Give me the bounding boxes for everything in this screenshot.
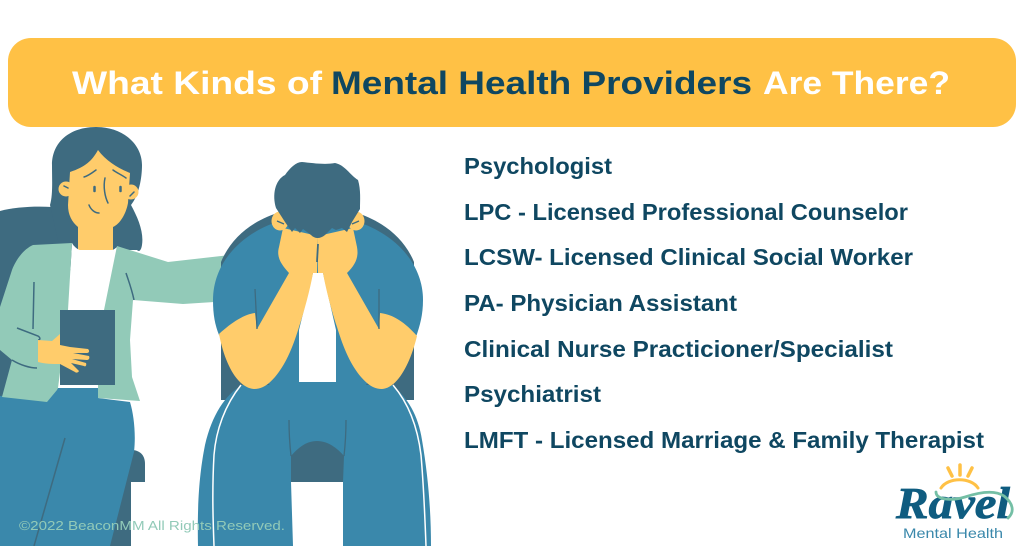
title (72, 65, 950, 101)
provider: psychiatrist: Psychiatrist (464, 381, 601, 407)
woman's jacket (0, 243, 230, 402)
title: What Kinds of (72, 65, 322, 101)
provider: LMFT: LMFT - Licensed Marriage & Family Therapist (464, 427, 984, 453)
provider: clinical nurse: Clinical Nurse Practicioner/Specialist (464, 336, 893, 362)
logo: Ravel Mental Health (895, 465, 1012, 541)
title: Are There? (763, 65, 950, 101)
provider: psychologist: Psychologist (464, 153, 612, 179)
woman's shirt (58, 243, 117, 388)
title: Mental Health Providers (331, 65, 752, 101)
woman's facial features (64, 170, 134, 213)
copyright notice: ©2022 BeaconMM All Rights Reserved. (19, 518, 285, 533)
man's shirt (213, 215, 423, 400)
woman's chair (0, 207, 145, 546)
man's hair (274, 162, 360, 238)
illustration: distressed man (198, 162, 431, 546)
man's arms and hands (219, 212, 417, 389)
jacket detail lines (12, 273, 134, 368)
man's detail lines (255, 221, 379, 329)
shirt centre white (299, 273, 336, 382)
provider list (464, 153, 984, 453)
chair seat between legs (291, 441, 344, 482)
logo sun (941, 465, 978, 488)
leg stripes (213, 385, 426, 546)
man's chair (221, 207, 414, 400)
logo wave (936, 492, 1012, 518)
logo tagline: Mental Health (903, 525, 1003, 541)
provider: PA: PA- Physician Assistant (464, 290, 737, 316)
illustration: woman comforting (0, 127, 230, 546)
provider: LPC: LPC - Licensed Professional Counselor (464, 199, 908, 225)
provider: LCSW: LCSW- Licensed Clinical Social Worker (464, 244, 913, 270)
woman's hair (50, 127, 142, 251)
logo wordmark: Ravel (895, 479, 1011, 528)
woman's hand (38, 334, 89, 373)
woman's face and neck (58, 150, 138, 250)
title banner (8, 38, 1016, 127)
woman's pants (0, 388, 135, 546)
tablet (60, 310, 115, 385)
man's legs (198, 385, 431, 546)
